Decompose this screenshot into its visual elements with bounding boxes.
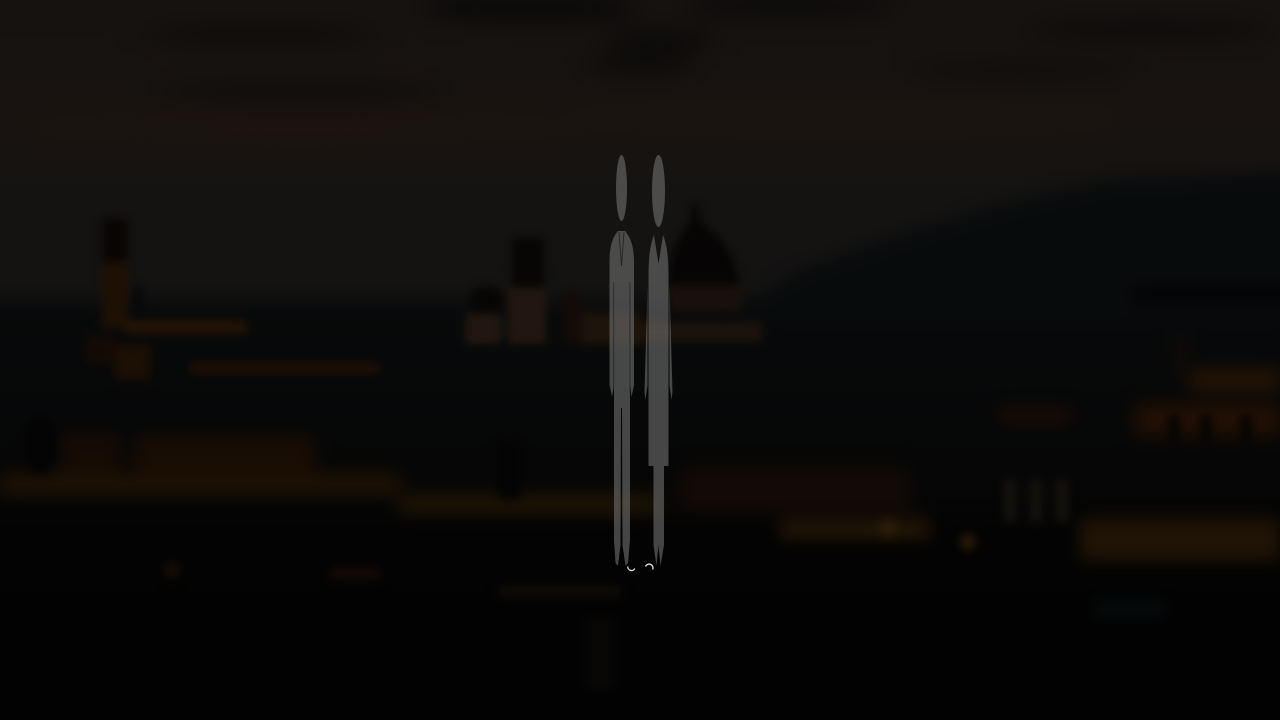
woman dress — [648, 235, 668, 566]
clouds — [0, 0, 1280, 142]
figure: man — [610, 155, 634, 566]
cathedral dome and bell tower — [465, 204, 762, 345]
dark gaps and small lights — [24, 415, 1252, 690]
tower left — [85, 218, 380, 380]
icon: right white arc — [646, 564, 653, 570]
distant hill — [740, 172, 1280, 320]
man collar and tie — [619, 232, 624, 266]
man arm slits — [614, 282, 630, 392]
man suit and legs — [610, 231, 634, 566]
city band glow — [0, 330, 1280, 561]
woman head — [652, 155, 665, 227]
icon: left white arc — [628, 566, 635, 571]
man head — [616, 155, 627, 221]
woman left arm — [644, 285, 648, 400]
figure: woman — [644, 155, 672, 566]
woman right arm — [670, 285, 672, 400]
